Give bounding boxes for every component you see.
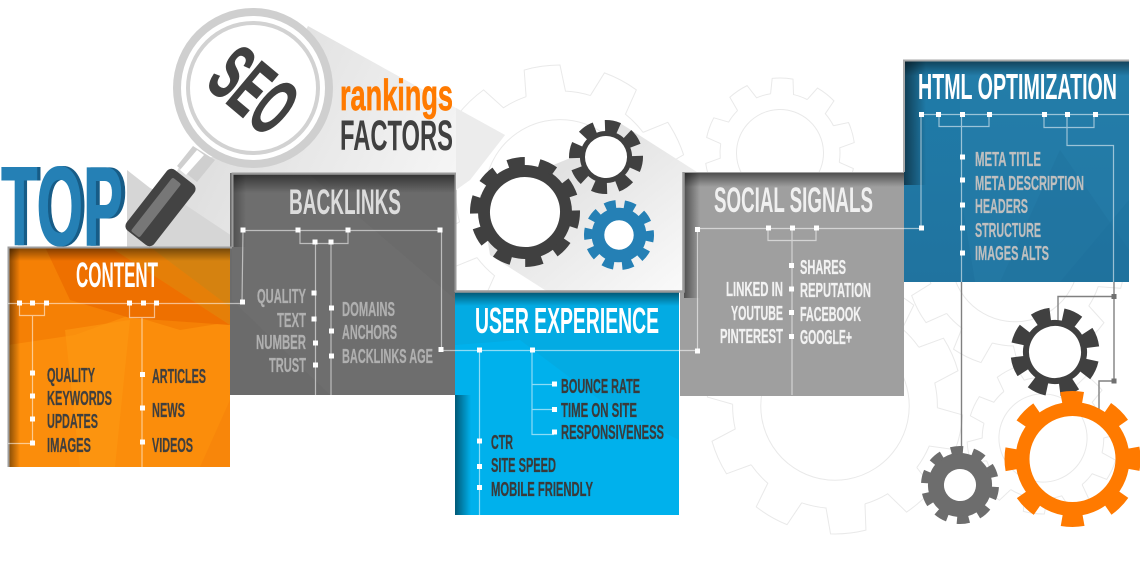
list: html items: STRUCTURE: [975, 220, 1041, 242]
panel: user experience: [455, 292, 679, 515]
list: html items: HEADERS: [975, 196, 1028, 218]
label: SEO: SEO: [193, 29, 314, 151]
list: technical metrics: MOBILE FRIENDLY: [491, 479, 593, 501]
list: social metrics: SHARES: [800, 257, 846, 279]
list: engagement metrics: [561, 376, 664, 444]
icon: grey gear: [918, 443, 1002, 527]
panel: content: [8, 247, 232, 467]
list: social metrics: REPUTATION: [800, 280, 871, 302]
panel: backlinks: [230, 173, 456, 395]
list: content right column: NEWS: [152, 400, 185, 422]
heading: social signals: SOCIAL SIGNALS: [714, 181, 873, 220]
list: content left column: IMAGES: [47, 435, 91, 457]
list: html items: [975, 149, 1084, 265]
list: backlinks left column: [256, 286, 306, 377]
list: html items: IMAGES ALTS: [975, 243, 1049, 265]
list: content right column: ARTICLES: [152, 366, 206, 388]
list: backlinks right column: [342, 299, 433, 368]
list: content right column: VIDEOS: [152, 435, 193, 457]
list: social metrics: [800, 257, 871, 349]
title: TOP: TOP: [4, 144, 127, 269]
list: backlinks left column: QUALITY: [257, 286, 306, 308]
list: content left column: KEYWORDS: [47, 388, 112, 410]
list: content left column: QUALITY: [47, 365, 95, 387]
title: rankings factors: rankings: [340, 71, 453, 120]
panel: gears: [455, 108, 697, 292]
title: rankings factors: FACTORS: [340, 112, 453, 160]
list: content left column: UPDATES: [47, 411, 98, 433]
list: content left column: [47, 365, 112, 457]
list: technical metrics: [491, 432, 593, 501]
list: technical metrics: CTR: [491, 432, 513, 454]
icon: large dark gear: [469, 156, 581, 268]
heading: backlinks: BACKLINKS: [289, 183, 401, 222]
icon: right dark gear: [1005, 302, 1105, 402]
heading: user experience: USER EXPERIENCE: [475, 300, 659, 341]
list: social networks: PINTEREST: [720, 326, 783, 348]
list: backlinks left column: NUMBER: [256, 332, 306, 354]
list: backlinks right column: BACKLINKS AGE: [342, 346, 433, 368]
list: technical metrics: SITE SPEED: [491, 455, 556, 477]
title: TOP: TOP: [1, 144, 123, 269]
icon: orange gear: [1010, 397, 1134, 521]
icon: small dark gear: [570, 121, 642, 193]
icon: blue gear: [587, 203, 651, 267]
list: social networks: YOUTUBE: [731, 303, 783, 325]
title: TOP: [1, 144, 127, 269]
icon: magnifying glass: [123, 8, 333, 249]
list: backlinks right column: ANCHORS: [342, 322, 397, 344]
list: engagement metrics: TIME ON SITE: [561, 400, 637, 422]
title: rankings factors: [340, 71, 453, 160]
list: backlinks left column: TRUST: [269, 355, 306, 377]
list: social networks: [720, 279, 783, 348]
list: engagement metrics: BOUNCE RATE: [561, 376, 640, 398]
list: backlinks right column: DOMAINS: [342, 299, 395, 321]
connector lines and nodes: [8, 114, 1129, 515]
list: content right column: [152, 366, 206, 457]
list: engagement metrics: RESPONSIVENESS: [561, 422, 664, 444]
panel: content: CONTENT: [76, 256, 158, 295]
panel: html optimization: [904, 60, 1129, 282]
list: social metrics: FACEBOOK: [800, 304, 861, 326]
list: html items: META TITLE: [975, 149, 1041, 171]
magnifier long shadow: [127, 26, 505, 247]
list: social networks: LINKED IN: [726, 279, 783, 301]
list: social metrics: GOOGLE+: [800, 327, 852, 349]
panel: social signals: [680, 172, 904, 396]
list: backlinks left column: TEXT: [277, 310, 306, 332]
background watermark gears: [407, 37, 1140, 562]
